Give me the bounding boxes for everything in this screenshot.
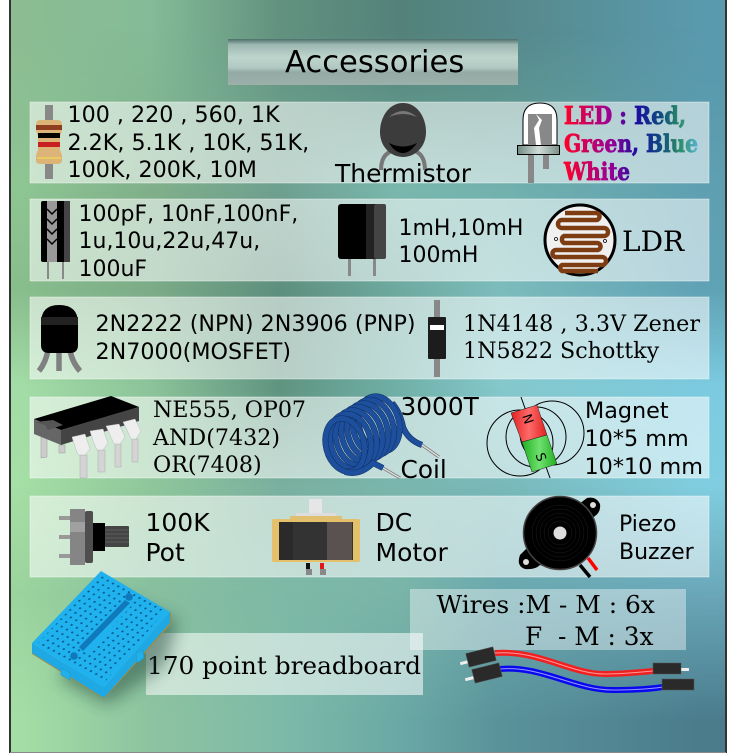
resistor values bbox=[68, 102, 309, 183]
capacitor values: 100uF bbox=[78, 257, 147, 282]
icon: LED bbox=[518, 103, 560, 183]
icon: coil bbox=[320, 392, 439, 478]
motor label bbox=[376, 508, 448, 567]
diode part numbers: 1N4148 , 3.3V Zener bbox=[463, 312, 700, 337]
icon: resistor bbox=[36, 105, 62, 179]
resistor values: 100K, 200K, 10M bbox=[68, 157, 257, 183]
IC part numbers: AND(7432) bbox=[152, 425, 280, 451]
magnet sizes: 10*5 mm bbox=[584, 426, 689, 452]
motor label: Motor bbox=[376, 538, 448, 567]
icon: breadboard bbox=[32, 571, 178, 705]
capacitor values: 100pF, 10nF,100nF, bbox=[78, 202, 298, 227]
icon: electrolytic capacitor bbox=[41, 201, 70, 279]
icon: magnet with field lines bbox=[487, 397, 584, 478]
panel: resistors, thermistor, LED bbox=[30, 101, 709, 188]
transistor part numbers: 2N7000(MOSFET) bbox=[96, 339, 291, 365]
IC part numbers bbox=[152, 398, 306, 478]
motor label: DC bbox=[376, 508, 412, 537]
panel: ICs, coil, magnet bbox=[30, 392, 709, 484]
breadboard label: 170 point breadboard bbox=[147, 652, 421, 680]
IC part numbers: NE555, OP07 bbox=[153, 398, 306, 423]
diode part numbers: 1N5822 Schottky bbox=[463, 338, 660, 364]
title bbox=[228, 39, 518, 85]
buzzer label: Buzzer bbox=[619, 540, 695, 565]
magnet sizes: 10*10 mm bbox=[584, 454, 703, 480]
pot label: 100K bbox=[146, 508, 210, 537]
magnet sizes: Magnet bbox=[585, 398, 669, 424]
icon: thermistor bbox=[380, 103, 426, 170]
capacitor values bbox=[78, 202, 298, 282]
icon: potentiometer bbox=[59, 509, 129, 565]
wires label bbox=[410, 589, 686, 651]
LED colours label bbox=[563, 101, 698, 186]
breadboard label bbox=[146, 633, 423, 695]
LED colours label: White bbox=[563, 157, 630, 186]
coil labels bbox=[400, 392, 480, 484]
LED colours label: Green, Blue bbox=[564, 129, 698, 158]
LED colours label: LED : Red, bbox=[564, 101, 686, 130]
icon: jumper wires bbox=[460, 647, 694, 690]
buzzer label bbox=[619, 512, 695, 565]
capacitor values: 1u,10u,22u,47u, bbox=[78, 229, 260, 254]
icon: inductor bbox=[338, 204, 386, 276]
inductor values bbox=[398, 216, 523, 268]
icon: magnet with field lines: S bbox=[532, 451, 548, 464]
icon: LDR bbox=[545, 205, 615, 275]
transistor part numbers bbox=[96, 312, 416, 365]
title: Accessories bbox=[285, 45, 464, 80]
inductor values: 100mH bbox=[398, 243, 478, 268]
coil labels: 3000T bbox=[400, 392, 480, 421]
resistor values: 100 , 220 , 560, 1K bbox=[68, 102, 281, 128]
thermistor label: Thermistor bbox=[334, 159, 472, 188]
icon: diode bbox=[428, 300, 446, 377]
resistor values: 2.2K, 5.1K , 10K, 51K, bbox=[68, 130, 309, 156]
panel: capacitors, inductors, LDR bbox=[30, 199, 709, 282]
wires label: Wires :M - M : 6x bbox=[436, 590, 655, 619]
icon: DC motor bbox=[272, 499, 360, 575]
icon: piezo buzzer bbox=[519, 496, 600, 577]
coil labels: Coil bbox=[400, 455, 447, 484]
buzzer label: Piezo bbox=[619, 512, 676, 537]
inductor values: 1mH,10mH bbox=[398, 216, 523, 241]
LDR label: LDR bbox=[622, 225, 685, 258]
IC part numbers: OR(7408) bbox=[153, 452, 262, 478]
pot label bbox=[146, 508, 210, 567]
wires label: F - M : 3x bbox=[525, 622, 654, 651]
icon: magnet with field lines: N bbox=[518, 412, 536, 426]
panel: pot, motor, buzzer bbox=[30, 496, 709, 577]
transistor part numbers: 2N2222 (NPN) 2N3906 (PNP) bbox=[96, 312, 416, 337]
magnet sizes bbox=[584, 398, 703, 480]
icon: DIP chip bbox=[34, 396, 141, 478]
icon: transistor bbox=[39, 305, 80, 371]
panel: transistors and diodes bbox=[30, 297, 709, 379]
pot label: Pot bbox=[146, 538, 185, 567]
diode part numbers bbox=[463, 312, 700, 364]
